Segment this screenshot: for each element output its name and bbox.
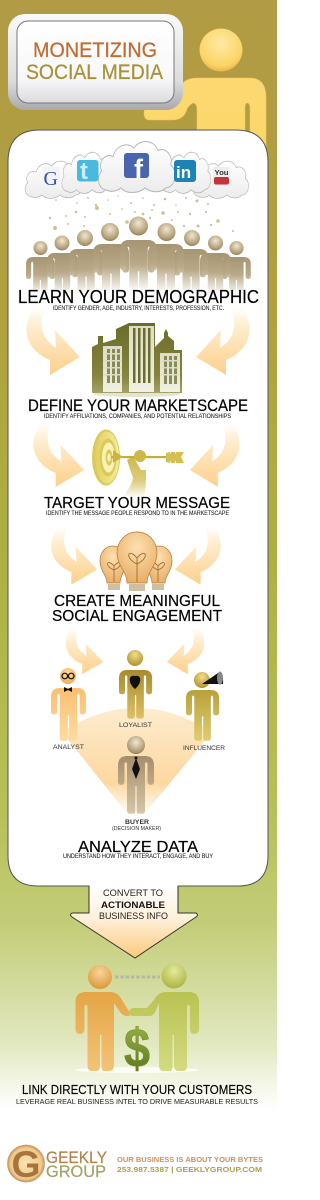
heading: define your marketscape: IDENTIFY AFFILIATIONS, COMPANIES, AND POTENTIAL RELATIONSHIPS <box>44 413 231 420</box>
arrow label: CONVERT TO <box>103 888 163 899</box>
icon: light bulbs <box>100 532 172 591</box>
heading: create meaningful social engagement: SOCIAL ENGAGEMENT <box>52 608 222 625</box>
icon: google: G <box>44 168 58 190</box>
arrow label: BUSINESS INFO <box>99 911 168 922</box>
icon: twitter <box>77 158 98 185</box>
social media clouds <box>25 141 249 198</box>
figure: influencer <box>183 672 225 752</box>
heading: link directly: LEVERAGE REAL BUSINESS INTEL TO DRIVE MEASURABLE RESULTS <box>16 1097 258 1106</box>
cloud: far right <box>193 161 249 198</box>
person right <box>129 964 199 1071</box>
bullseye <box>92 430 120 486</box>
title text: MONETIZING <box>33 39 157 62</box>
heading: define your marketscape: DEFINE YOUR MARKETSCAPE <box>28 397 248 415</box>
heading: analyze data <box>63 839 213 860</box>
cloud: far left <box>25 161 83 198</box>
icon: facebook <box>124 153 149 184</box>
presenter figure <box>144 28 266 150</box>
heading: learn your demographic: LEARN YOUR DEMOGRAPHIC <box>18 287 259 307</box>
arrow label: ACTIONABLE <box>101 900 165 911</box>
icon: linkedin: in <box>176 163 191 182</box>
falling data confetti <box>49 195 234 232</box>
arrow: marketscape right <box>196 307 249 375</box>
heading: create meaningful social engagement <box>52 593 222 625</box>
figure: loyalist <box>119 650 152 729</box>
figure: analyst: ANALYST <box>53 744 84 751</box>
cone of influence <box>62 708 212 815</box>
arrow: marketscape left <box>27 307 80 375</box>
logo: geekly group: GROUP <box>46 1163 106 1181</box>
arrow: target right <box>190 423 240 487</box>
icon: youtube: You <box>214 168 229 177</box>
arrow: personas left <box>66 628 103 674</box>
icon: handshake with dollar <box>75 964 199 1079</box>
arrow: target left <box>33 423 84 487</box>
icon: city buildings <box>92 323 182 397</box>
bulb right <box>146 546 172 590</box>
heading: link directly: LINK DIRECTLY WITH YOUR CUSTOMERS <box>22 1083 252 1097</box>
figure: analyst <box>51 668 86 751</box>
white content panel <box>8 130 268 913</box>
title text: SOCIAL MEDIA <box>26 61 163 84</box>
title plaque <box>8 14 183 110</box>
tagline and contact <box>117 1155 263 1174</box>
icon: twitter: t <box>80 158 88 185</box>
title text <box>26 39 163 84</box>
figure: loyalist: LOYALIST <box>119 722 152 729</box>
heads <box>34 216 244 255</box>
icon: linkedin <box>174 160 196 182</box>
icon: youtube <box>213 167 230 186</box>
tagline and contact: OUR BUSINESS IS ABOUT YOUR BYTES <box>117 1155 263 1164</box>
heading: target your message: IDENTIFY THE MESSAGE PEOPLE RESPOND TO IN THE MARKETSCAPE <box>46 510 229 517</box>
arrow: engagement right <box>175 527 221 585</box>
cloud: left <box>62 152 112 193</box>
arrow shaft and fletching <box>111 456 167 458</box>
dotted link <box>115 976 160 978</box>
heading: target your message: TARGET YOUR MESSAGE <box>44 495 230 512</box>
person left <box>76 965 130 1071</box>
heading: learn your demographic: IDENTIFY GENDER, AGE, INDUSTRY, INTERESTS, PROFESSION, ETC. <box>53 305 224 312</box>
dollar sign: $ <box>124 1017 150 1079</box>
bulb center <box>117 532 157 591</box>
icon: target and archer <box>92 430 184 498</box>
cloud: center <box>98 141 175 193</box>
heading: analyze data: ANALYZE DATA <box>78 839 198 856</box>
bulb left <box>100 546 126 590</box>
arrow: personas right <box>167 628 204 674</box>
tagline and contact: 253.987.5387 | GEEKLYGROUP.COM <box>117 1165 262 1174</box>
icon: facebook: f <box>134 154 144 184</box>
arrow: engagement left <box>51 527 97 585</box>
cloud: right <box>161 152 211 193</box>
arrow: convert <box>70 886 198 958</box>
figure: buyer: BUYER <box>125 819 149 826</box>
heading: analyze data: UNDERSTAND HOW THEY INTERACT, ENGAGE, AND BUY <box>63 853 213 860</box>
figure: buyer <box>112 736 161 832</box>
heading: create meaningful social engagement: CREATE MEANINGFUL <box>54 593 220 610</box>
archer body <box>122 456 146 498</box>
heading: link directly <box>16 1083 258 1106</box>
person row outer <box>26 240 251 302</box>
logo mark: G <box>12 1144 40 1185</box>
figure: buyer: (DECISION MAKER) <box>112 826 161 832</box>
logo: geekly group <box>8 1144 107 1185</box>
arrow label <box>99 888 168 922</box>
figure: influencer: INFLUENCER <box>183 745 225 752</box>
crowd of people <box>26 216 251 302</box>
logo: geekly group: GEEKLY <box>46 1149 107 1167</box>
